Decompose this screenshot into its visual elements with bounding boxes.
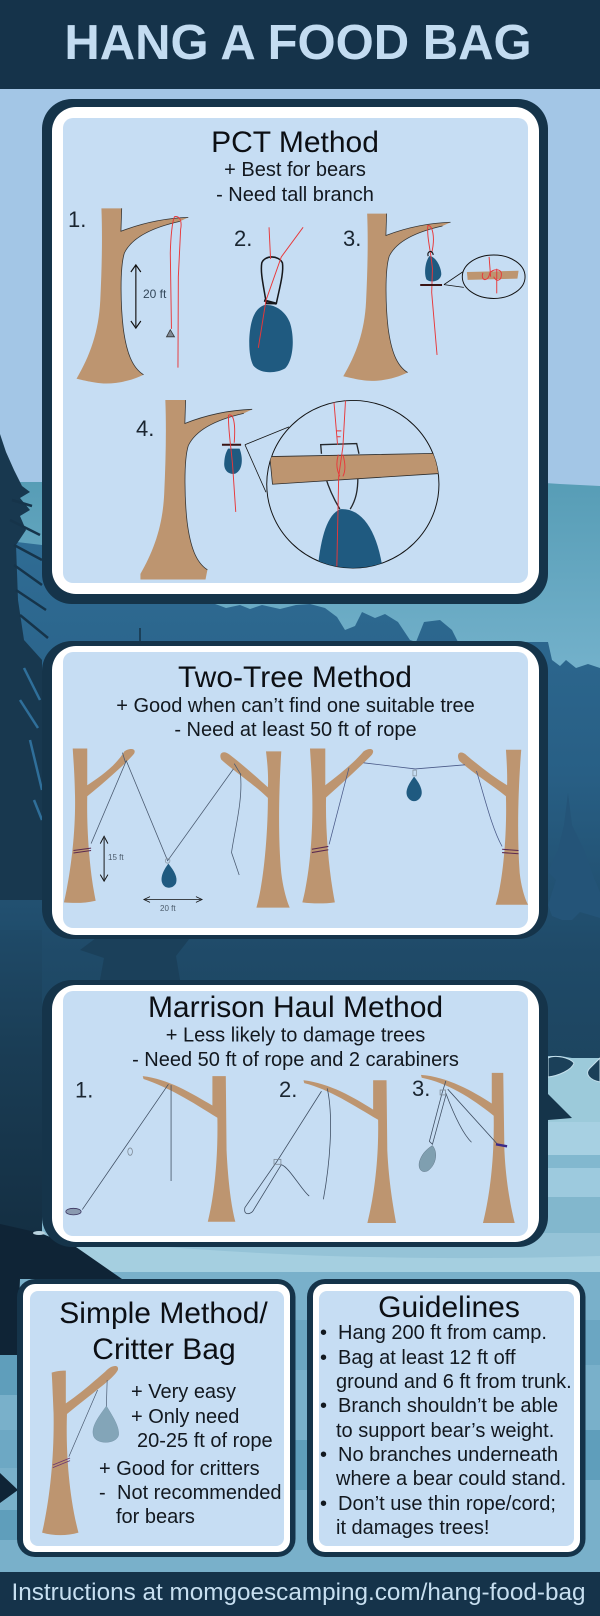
step 1: tree, rope, coil, carabiner: [66, 1076, 235, 1222]
PCT drawings: [77, 208, 525, 579]
right setup: bag hung between two trees: [302, 749, 528, 905]
pros and cons list: + Very easy: [131, 1381, 236, 1403]
step 3: tree, hanging bag and knot callout: [343, 214, 525, 381]
step numbers: 2.: [279, 1077, 297, 1102]
guideline bullets: •: [320, 1493, 327, 1515]
left foreground pine tree: [0, 434, 48, 900]
"20 ft" label: 20 ft: [143, 287, 167, 301]
step numbers: 3.: [343, 226, 361, 251]
guideline bullets: Hang 200 ft from camp.: [338, 1322, 547, 1344]
guideline bullets: to support bear’s weight.: [336, 1420, 554, 1442]
footer bar: [0, 1572, 600, 1616]
distance labels: 15 ft: [108, 853, 124, 862]
pros and cons: + Best for bears: [224, 159, 366, 181]
step 2: bag and carabiner: [249, 227, 303, 372]
pros and cons: + Good when can’t find one suitable tree: [116, 695, 475, 717]
guideline bullets: •: [320, 1444, 327, 1466]
guideline bullets: No branches underneath: [338, 1444, 558, 1466]
step numbers: [68, 207, 361, 441]
shadowed tree between panels: [80, 938, 190, 980]
pros and cons: [116, 695, 475, 741]
step 4: tree and magnified hang: [140, 399, 439, 579]
step numbers: 3.: [412, 1076, 430, 1101]
step numbers: [75, 1076, 430, 1102]
heading: Two-Tree Method: Two-Tree Method: [178, 661, 412, 694]
distance labels: 20 ft: [160, 904, 176, 913]
heading: Simple Method / Critter Bag: Simple Method/: [59, 1297, 268, 1330]
step 3: tree, hoisted bag and strap: [419, 1073, 515, 1223]
pros and cons list: + Good for critters: [99, 1458, 260, 1480]
pros and cons: - Need at least 50 ft of rope: [174, 719, 417, 741]
heading: Simple Method / Critter Bag: [59, 1297, 268, 1366]
two-tree drawings: [64, 749, 528, 908]
right background pine tree: [548, 793, 600, 920]
pros and cons list: Not recommended: [117, 1482, 282, 1504]
pros and cons list: + Only need: [131, 1406, 239, 1428]
pros and cons: [132, 1024, 459, 1071]
guideline bullets: [320, 1322, 572, 1539]
heading: Guidelines: Guidelines: [378, 1291, 520, 1324]
distance labels: [108, 853, 176, 913]
step numbers: 4.: [136, 416, 154, 441]
heading: Marrison Haul Method: Marrison Haul Method: [148, 991, 443, 1024]
panel: guidelines: [307, 1279, 586, 1557]
step 2: tree, loop and carabiner: [245, 1080, 396, 1223]
pros and cons list: for bears: [116, 1506, 195, 1528]
panel: PCT method: [42, 99, 548, 604]
pros and cons list: [99, 1381, 282, 1528]
footer link text: Instructions at momgoescamping.com/hang-food-bag: [12, 1579, 585, 1606]
header bar: [0, 0, 600, 89]
step numbers: 1.: [68, 207, 86, 232]
guideline bullets: •: [320, 1322, 327, 1344]
left setup: two trees with rope and bag: [64, 749, 290, 908]
heading: Simple Method / Critter Bag: Critter Bag: [92, 1333, 236, 1366]
pros and cons: + Less likely to damage trees: [166, 1024, 425, 1046]
title: HANG A FOOD BAG: [64, 16, 532, 70]
heading: PCT Method: PCT Method: [211, 126, 379, 159]
step numbers: 1.: [75, 1078, 93, 1102]
guideline bullets: Branch shouldn’t be able: [338, 1395, 558, 1417]
guideline bullets: •: [320, 1347, 327, 1369]
pros and cons: [216, 159, 374, 206]
panel: simple method / critter bag: [17, 1279, 296, 1557]
guideline bullets: ground and 6 ft from trunk.: [336, 1371, 572, 1393]
tree with rope and bag: [42, 1366, 119, 1535]
step 1: tree with rope and rock: [77, 208, 188, 384]
guideline bullets: where a bear could stand.: [335, 1468, 566, 1490]
pros and cons list: -: [99, 1482, 106, 1504]
guideline bullets: Bag at least 12 ft off: [338, 1347, 516, 1369]
pros and cons: - Need 50 ft of rope and 2 carabiners: [132, 1049, 459, 1071]
Marrison drawings: [66, 1073, 515, 1223]
guideline bullets: Don’t use thin rope/cord;: [338, 1493, 556, 1515]
step numbers: 2.: [234, 226, 252, 251]
guideline bullets: it damages trees!: [336, 1517, 489, 1539]
pros and cons list: 20-25 ft of rope: [137, 1430, 273, 1452]
pros and cons: - Need tall branch: [216, 184, 374, 206]
panel: Two-Tree method: [42, 641, 548, 939]
panel: Marrison Haul method: [42, 980, 548, 1247]
guideline bullets: •: [320, 1395, 327, 1417]
